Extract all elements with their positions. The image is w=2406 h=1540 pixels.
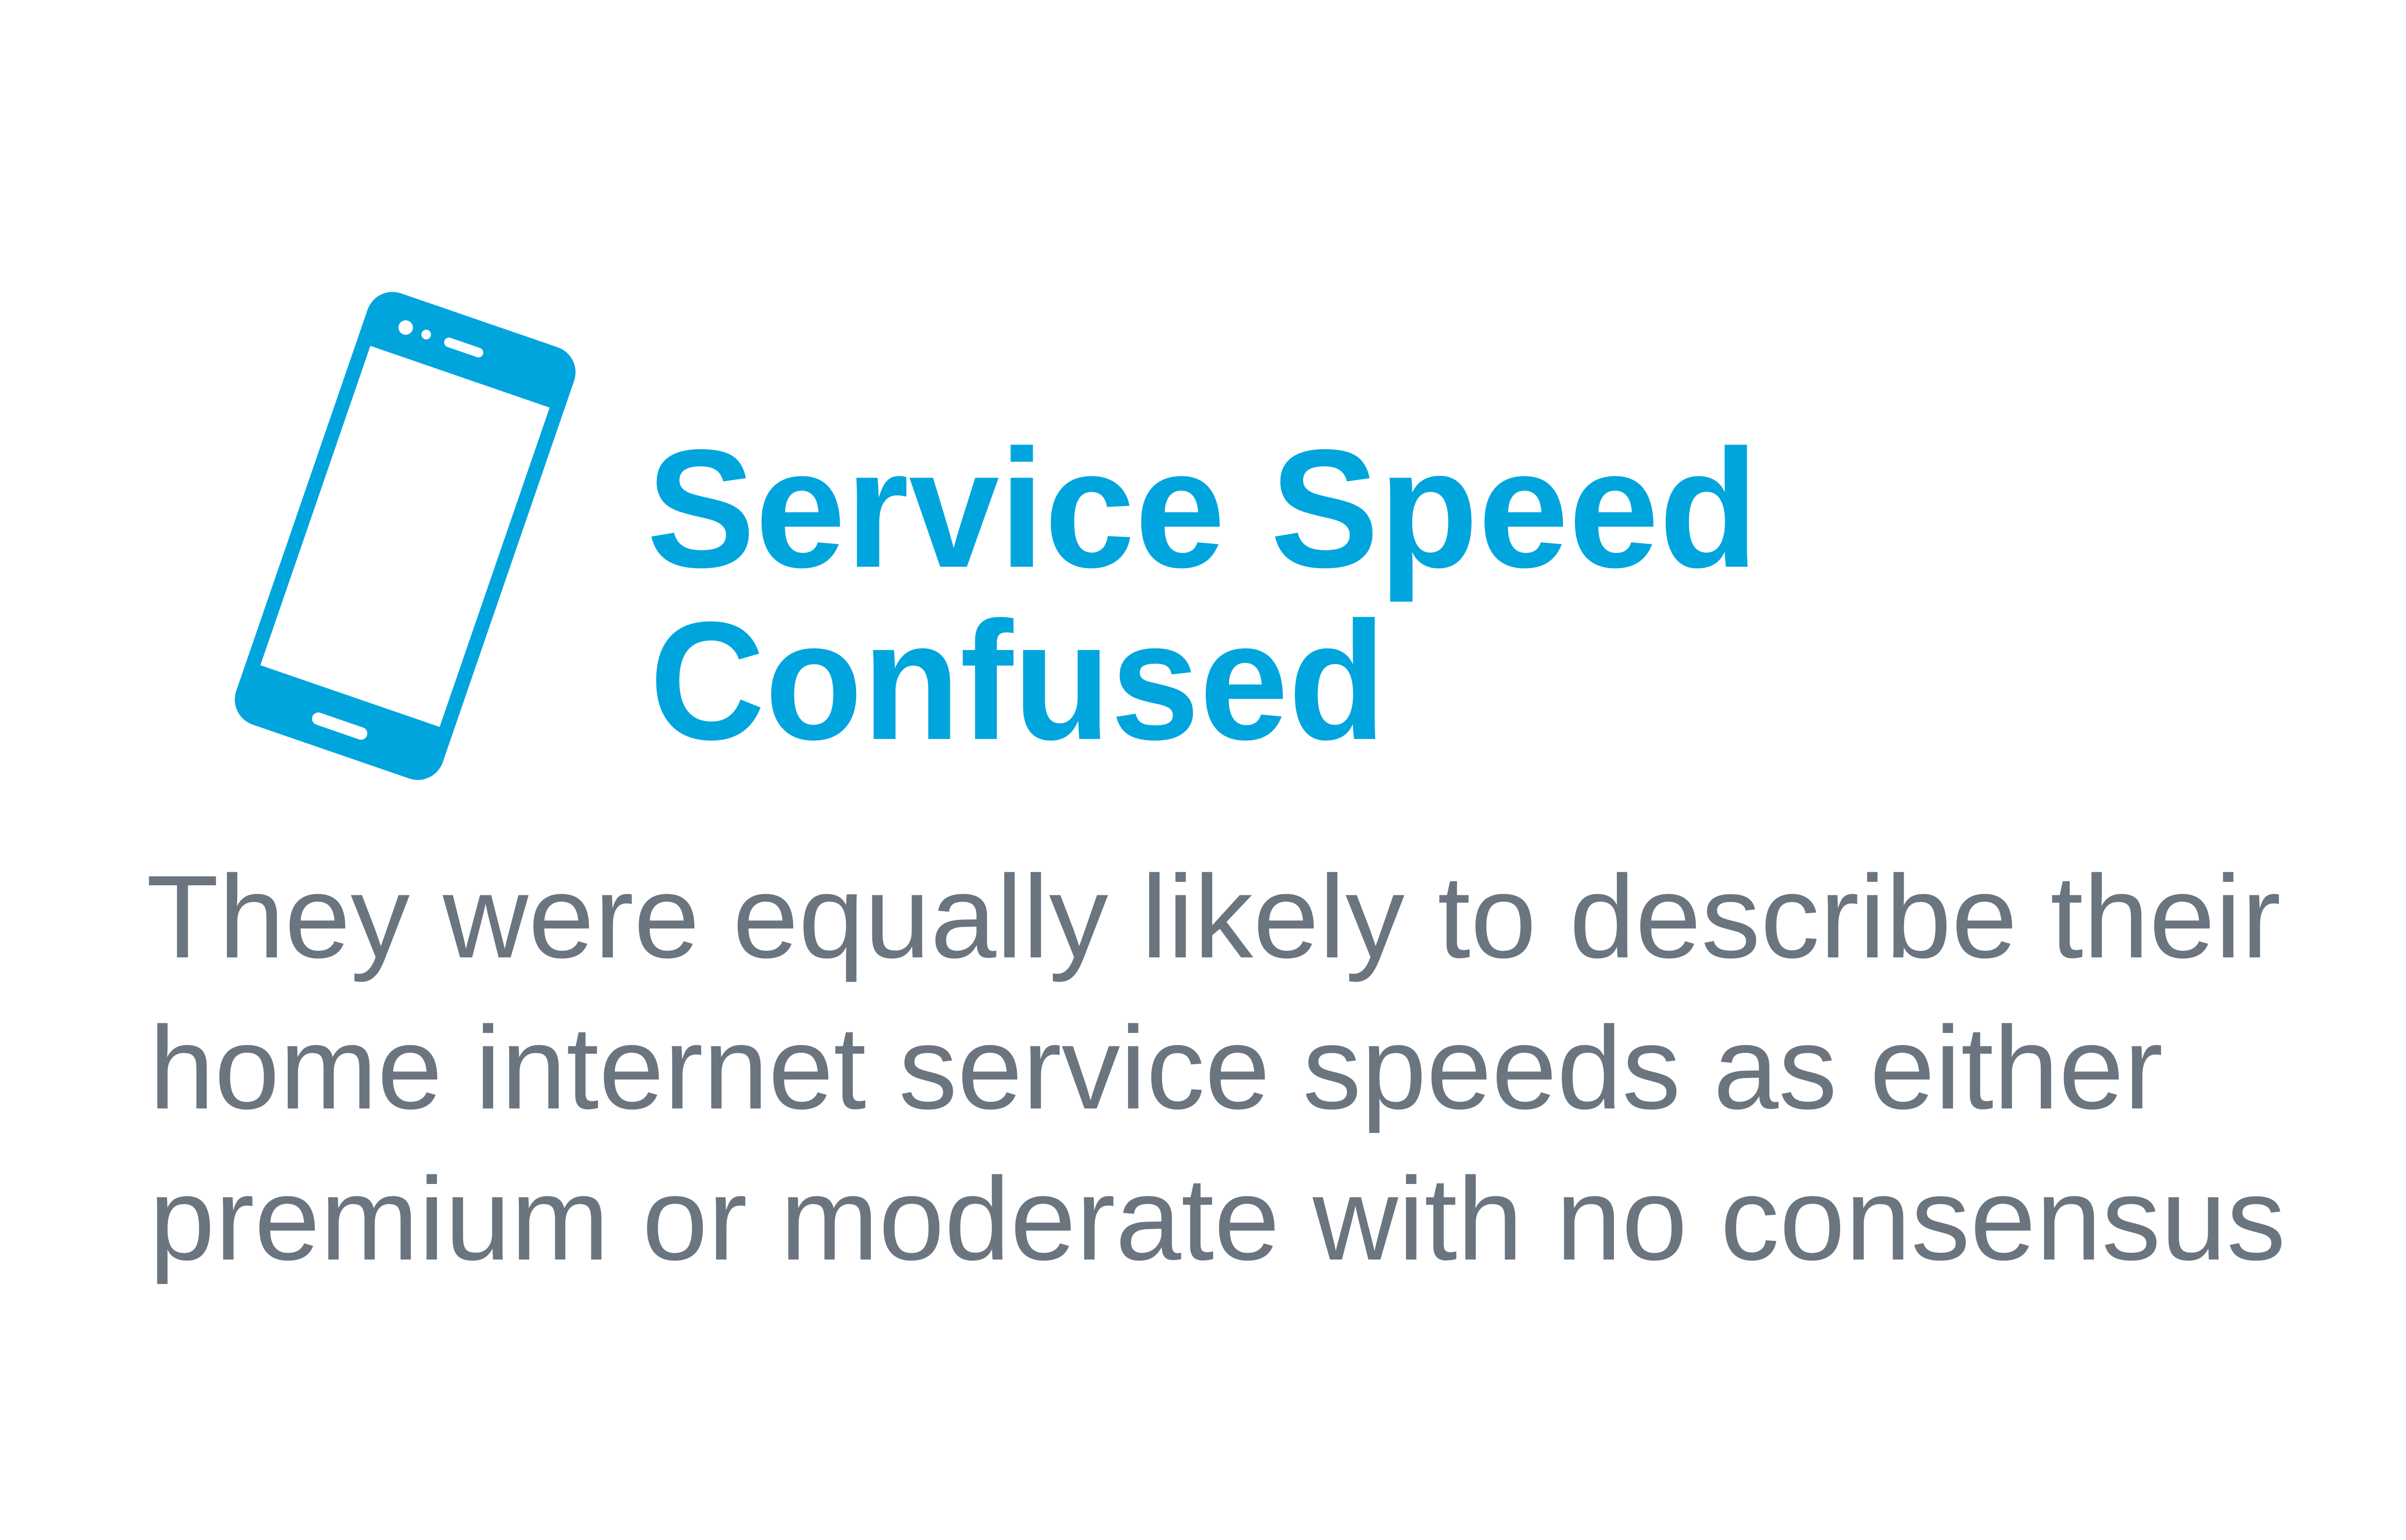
- body text: [146, 851, 2286, 1285]
- icon: smartphone: [228, 285, 583, 787]
- body text: They were equally likely to describe their: [146, 851, 2281, 982]
- body text: premium or moderate with no consensus: [149, 1153, 2286, 1285]
- title: Service Speed: [647, 415, 1758, 604]
- title: Confused: [650, 587, 1386, 775]
- title: [647, 415, 1758, 775]
- body text: home internet service speeds as either: [149, 1002, 2163, 1133]
